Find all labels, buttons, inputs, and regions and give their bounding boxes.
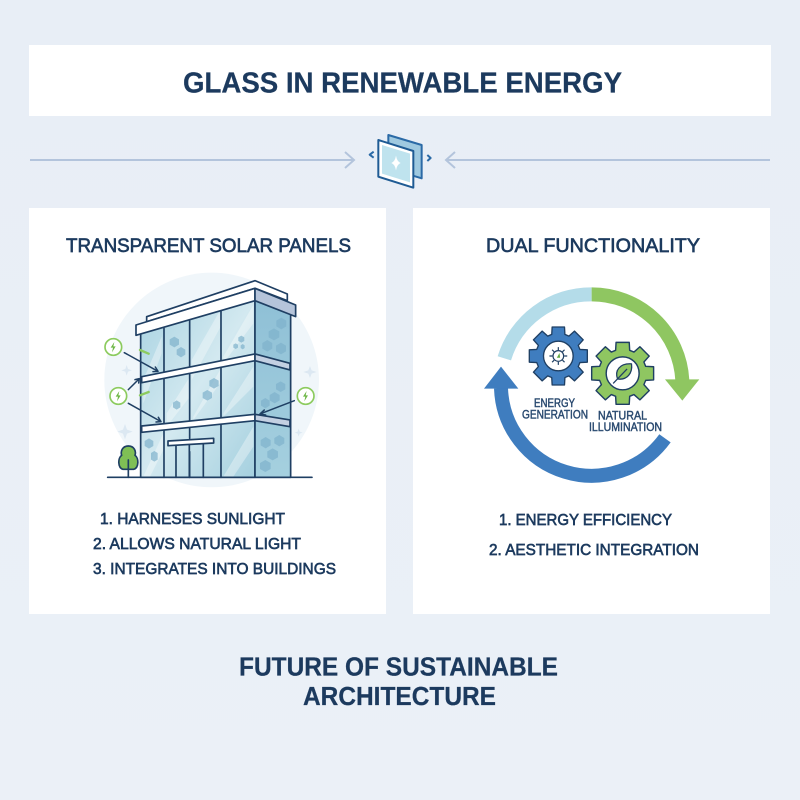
gear: energy generation bbox=[529, 327, 587, 385]
panel: dual functionality bbox=[413, 208, 770, 614]
icon: glass panes bbox=[370, 135, 431, 188]
gear label: natural illumination: NATURAL bbox=[598, 408, 647, 422]
panel heading: transparent solar panels: TRANSPARENT SOLAR PANELS bbox=[66, 236, 351, 257]
tree bbox=[119, 446, 138, 469]
cycle arrow: blue bbox=[484, 367, 665, 476]
glass reflections bbox=[143, 305, 253, 477]
panel list: dual benefits bbox=[489, 512, 699, 559]
diagram: cycle with gears bbox=[484, 294, 699, 476]
sparkles bbox=[117, 365, 317, 439]
footer heading: ARCHITECTURE bbox=[303, 683, 496, 711]
gear label: energy generation: GENERATION bbox=[522, 408, 588, 422]
floor slabs bbox=[142, 354, 255, 383]
footer heading bbox=[239, 654, 558, 711]
cycle arc: light blue bbox=[504, 294, 592, 358]
energy badges bbox=[105, 339, 314, 404]
gear label: natural illumination bbox=[589, 408, 662, 434]
mullions bbox=[164, 311, 221, 477]
title banner bbox=[29, 45, 771, 116]
panel list: dual benefits: 1. ENERGY EFFICIENCY bbox=[499, 512, 672, 529]
left arrow to glass icon bbox=[30, 152, 354, 168]
cycle arrow: green bbox=[592, 294, 699, 401]
gear label: natural illumination: ILLUMINATION bbox=[589, 420, 662, 434]
panel list: solar benefits: 1. HARNESES SUNLIGHT bbox=[100, 511, 285, 528]
entrance bbox=[176, 444, 203, 477]
panel: transparent solar panels bbox=[29, 208, 386, 614]
panel list: dual benefits: 2. AESTHETIC INTEGRATION bbox=[489, 542, 699, 559]
ground bbox=[108, 475, 312, 480]
callout arrows bbox=[124, 353, 294, 422]
panel heading: dual functionality: DUAL FUNCTIONALITY bbox=[486, 236, 700, 257]
gear label: energy generation bbox=[522, 396, 588, 422]
gear: natural illumination bbox=[592, 342, 654, 404]
gear label: energy generation: ENERGY bbox=[534, 396, 575, 410]
green dashes bbox=[140, 350, 149, 395]
panel list: solar benefits: 3. INTEGRATES INTO BUILDINGS bbox=[93, 561, 336, 578]
panel list: solar benefits bbox=[93, 511, 336, 578]
illustration: glass building bbox=[104, 273, 319, 487]
panel list: solar benefits: 2. ALLOWS NATURAL LIGHT bbox=[93, 536, 301, 553]
footer heading: FUTURE OF SUSTAINABLE bbox=[239, 654, 558, 682]
building glass bbox=[141, 300, 255, 477]
roof bbox=[147, 281, 287, 322]
right arrow to glass icon bbox=[446, 152, 770, 168]
title: GLASS IN RENEWABLE ENERGY bbox=[183, 68, 622, 100]
hexagon cells bbox=[145, 318, 286, 472]
